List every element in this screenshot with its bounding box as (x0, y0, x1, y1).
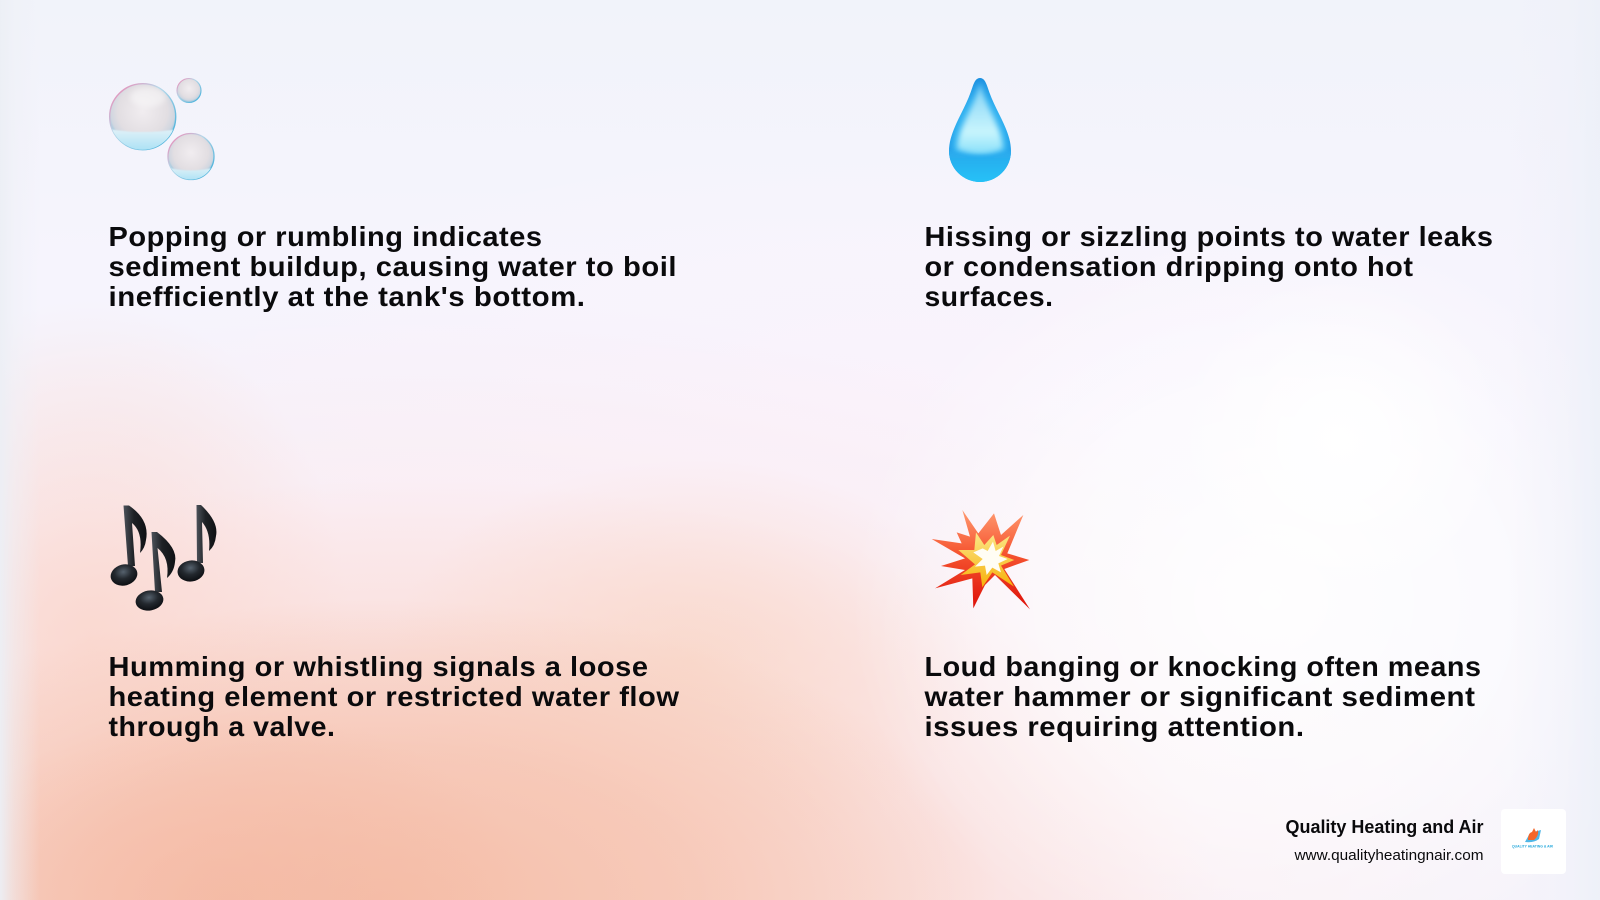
text: humming or whistling: Humming or whistling signals a loose (108, 651, 648, 682)
text: popping or rumbling: inefficiently at the tank's bottom. (108, 281, 586, 312)
logo card (1501, 809, 1566, 874)
text: loud banging: Loud banging or knocking often means (924, 651, 1482, 682)
text: loud banging: water hammer or significant sediment (923, 681, 1476, 712)
text: humming or whistling (108, 651, 680, 742)
text: popping or rumbling: sediment buildup, causing water to boil (108, 251, 677, 282)
text: popping or rumbling: Popping or rumbling indicates (108, 221, 542, 252)
icon: musical notes (108, 505, 216, 613)
text: hissing or sizzling (924, 221, 1494, 312)
text: humming or whistling: heating element or restricted water flow (108, 681, 680, 712)
text: hissing or sizzling: surfaces. (924, 281, 1054, 312)
footer brand name: Quality Heating and Air (1286, 817, 1484, 837)
icon: bubbles (108, 78, 216, 182)
text: popping or rumbling (108, 221, 677, 312)
text: humming or whistling: through a valve. (108, 711, 336, 742)
footer website: www.qualityheatingnair.com (1293, 847, 1484, 864)
text: loud banging: issues requiring attention. (924, 711, 1304, 742)
icon: water drop (949, 78, 1011, 182)
text: hissing or sizzling: Hissing or sizzling points to water leaks (924, 221, 1494, 252)
icon: explosion (932, 510, 1030, 609)
text: loud banging (923, 651, 1482, 742)
text: hissing or sizzling: or condensation dripping onto hot (924, 251, 1414, 282)
logo card: QUALITY HEATING & AIR (1512, 844, 1553, 848)
